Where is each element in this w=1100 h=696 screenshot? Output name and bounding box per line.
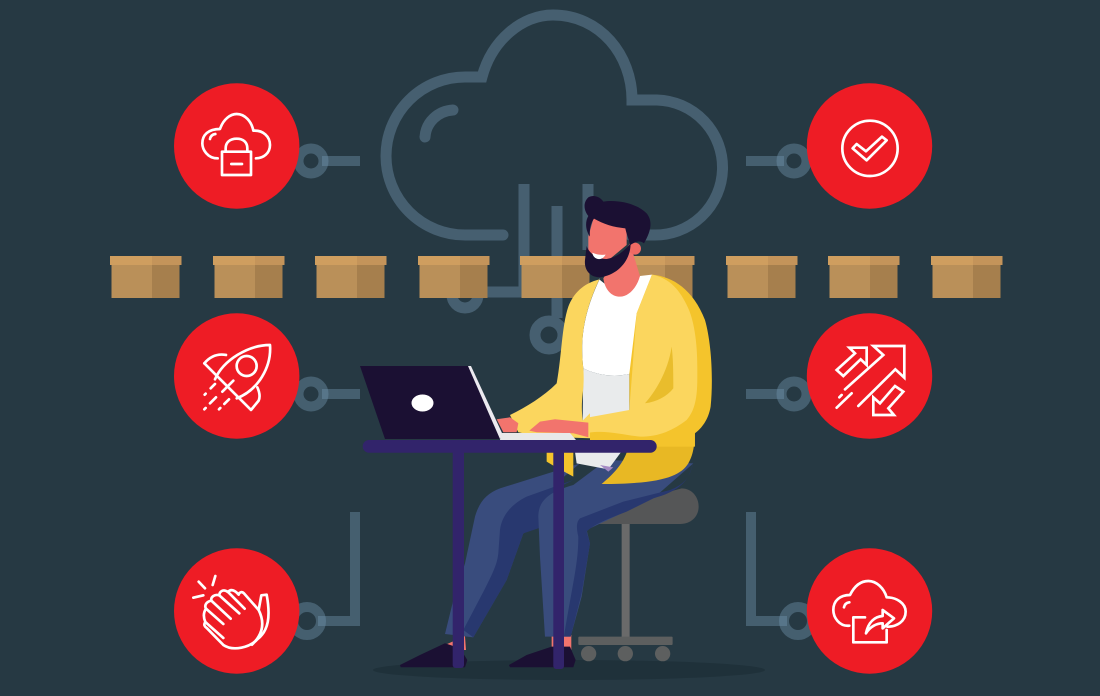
icon: clapping hands badge	[174, 548, 299, 674]
icon: cloud lock badge	[174, 83, 299, 209]
connector: top left	[298, 148, 360, 174]
connector: bottom left	[293, 512, 355, 635]
man: torso and cardigan	[510, 275, 712, 484]
icon: growth arrows badge	[807, 313, 932, 439]
icon: cloud share badge	[807, 548, 932, 674]
man: legs and shoes	[400, 460, 693, 667]
man: hands	[497, 417, 588, 437]
connector: top right	[746, 148, 806, 174]
icon: check mark badge	[807, 83, 932, 209]
connector: bottom right	[751, 512, 812, 635]
connector: middle left	[298, 382, 360, 406]
floor shadow	[373, 660, 765, 680]
large cloud outline	[386, 15, 723, 235]
icon: rocket badge	[174, 313, 299, 439]
row of cardboard boxes	[110, 256, 1002, 298]
central circuit lines behind the boxes	[452, 184, 588, 349]
stool	[578, 488, 699, 661]
desk	[363, 440, 657, 669]
man: head with hair and beard	[585, 196, 651, 297]
connector: middle right	[746, 382, 806, 406]
laptop	[360, 366, 576, 440]
